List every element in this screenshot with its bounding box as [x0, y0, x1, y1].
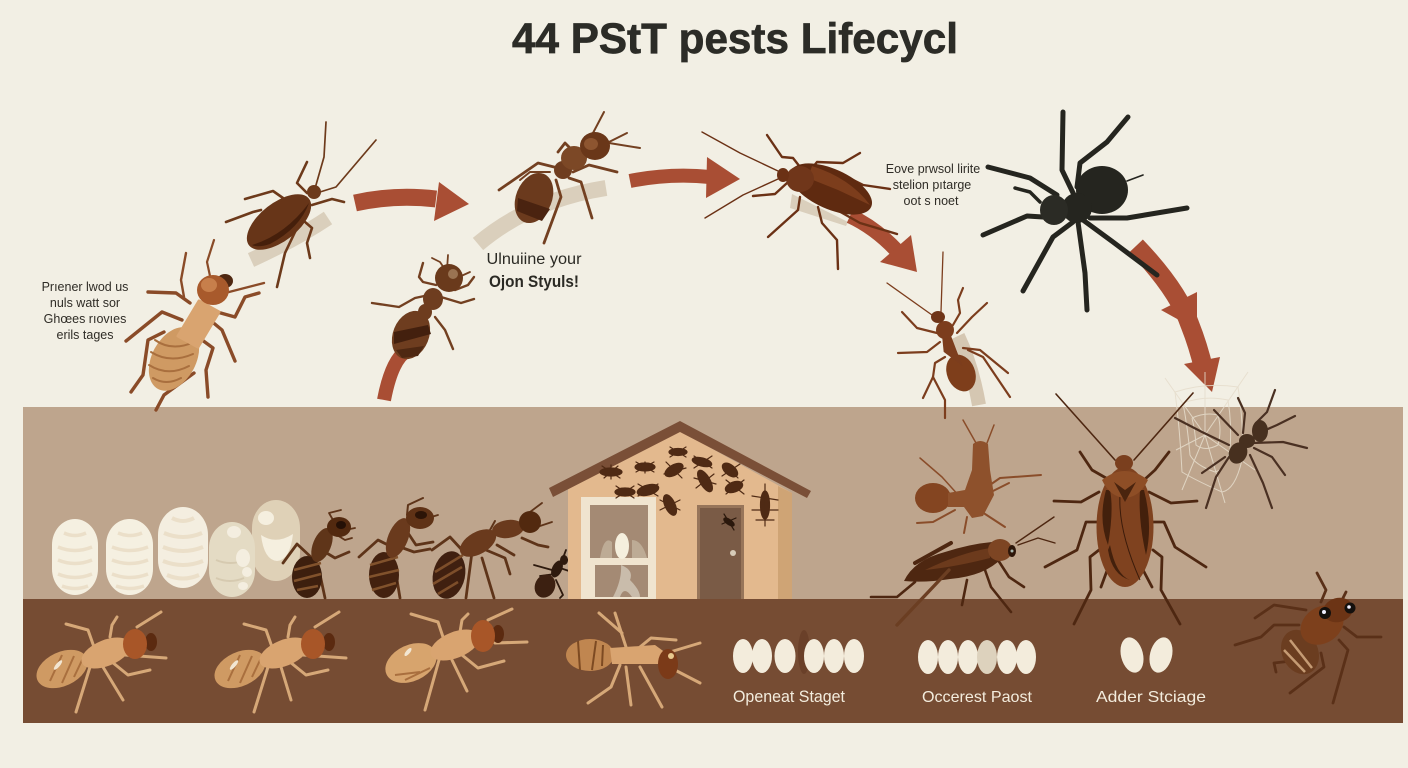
- panel: soil band: [23, 599, 1403, 723]
- insect: row ant 1: [283, 510, 355, 598]
- text block: centre caption: Ulnuiine your: [486, 251, 582, 268]
- insect: side cockroach: [871, 517, 1055, 625]
- arrow: second arrow: [630, 157, 740, 198]
- insect: small descending ant: [887, 252, 1010, 418]
- insect: row ant 3: [428, 503, 552, 602]
- text block: right caption: stelion pıtarge: [893, 178, 971, 192]
- title: 44 PStT pests Lifecycl: [512, 15, 958, 63]
- text block: left caption: [42, 280, 128, 342]
- text block: right caption: oot s noet: [904, 194, 959, 208]
- arrow: fourth descending arrow: [1136, 246, 1220, 392]
- panel: mid-ground band: [23, 407, 1403, 599]
- text block: right caption: [886, 162, 980, 208]
- text block: centre caption: Ojon Styuls!: [489, 272, 579, 291]
- termite: soil 1: [30, 612, 166, 712]
- insect: pale termite: [126, 240, 264, 410]
- text block: left caption: Ghœes rıovıes: [44, 312, 126, 326]
- insect: large cockroach: [1045, 393, 1206, 624]
- arrow: third descending arrow: [850, 216, 917, 272]
- text block: left caption: erils tages: [57, 328, 113, 342]
- house door: [697, 505, 744, 599]
- cocoon 5: [252, 500, 300, 581]
- eggs: group 2: [918, 640, 1036, 674]
- arrow: first curved arrow: [355, 182, 469, 221]
- text block: centre caption: [486, 251, 582, 291]
- arrow: rising stem below ant: [384, 350, 408, 400]
- house side shading: [778, 486, 792, 599]
- text block: left caption: Prıener lwod us: [42, 280, 128, 294]
- cocoon 1: [52, 519, 98, 595]
- insect: lower ant: [372, 255, 474, 365]
- termite: soil 2: [208, 612, 346, 712]
- eggs: group 3: [1117, 635, 1176, 675]
- cocoons: pupae row: [52, 500, 300, 597]
- path trace: pale arc behind beetle: [251, 218, 328, 260]
- eggs: group 1: [733, 630, 864, 674]
- insect: small dark ant: [531, 545, 581, 601]
- insect: brown silhouette ant: [915, 420, 1041, 533]
- cocoon 2: [106, 519, 153, 595]
- insect: row ant 2: [359, 498, 438, 598]
- text block: right caption: Eove prwsol lirite: [886, 162, 980, 176]
- label: stage 1: Openeat Staget: [733, 688, 845, 706]
- insect: bottom right beetle: [1235, 573, 1381, 703]
- insect: large black spider: [983, 112, 1187, 310]
- insect: flying cockroach: [702, 132, 897, 269]
- label: stage 3: Adder Stciage: [1096, 689, 1206, 706]
- house: [549, 421, 811, 599]
- path trace: pale patch behind cockroach: [790, 194, 848, 226]
- insect: upper ant: [499, 112, 640, 243]
- insect: small spider on web: [1175, 390, 1307, 508]
- infestation on house: [600, 447, 778, 530]
- house roof: [549, 421, 811, 498]
- spider web: [1165, 372, 1255, 503]
- house wall: [568, 431, 792, 599]
- cocoon 4: [209, 522, 255, 597]
- text block: left caption: nuls watt sor: [50, 296, 120, 310]
- path trace: pale arc behind upper ant: [478, 188, 606, 244]
- termite: soil 3: [379, 609, 527, 710]
- cocoon 3: [158, 507, 208, 588]
- house window: [581, 497, 656, 599]
- label: stage 2: Occerest Paost: [922, 689, 1033, 706]
- termite: soil 4: [566, 613, 700, 707]
- insect: brown beetle: [226, 122, 376, 287]
- path trace: pale arc behind lower ant: [958, 336, 979, 405]
